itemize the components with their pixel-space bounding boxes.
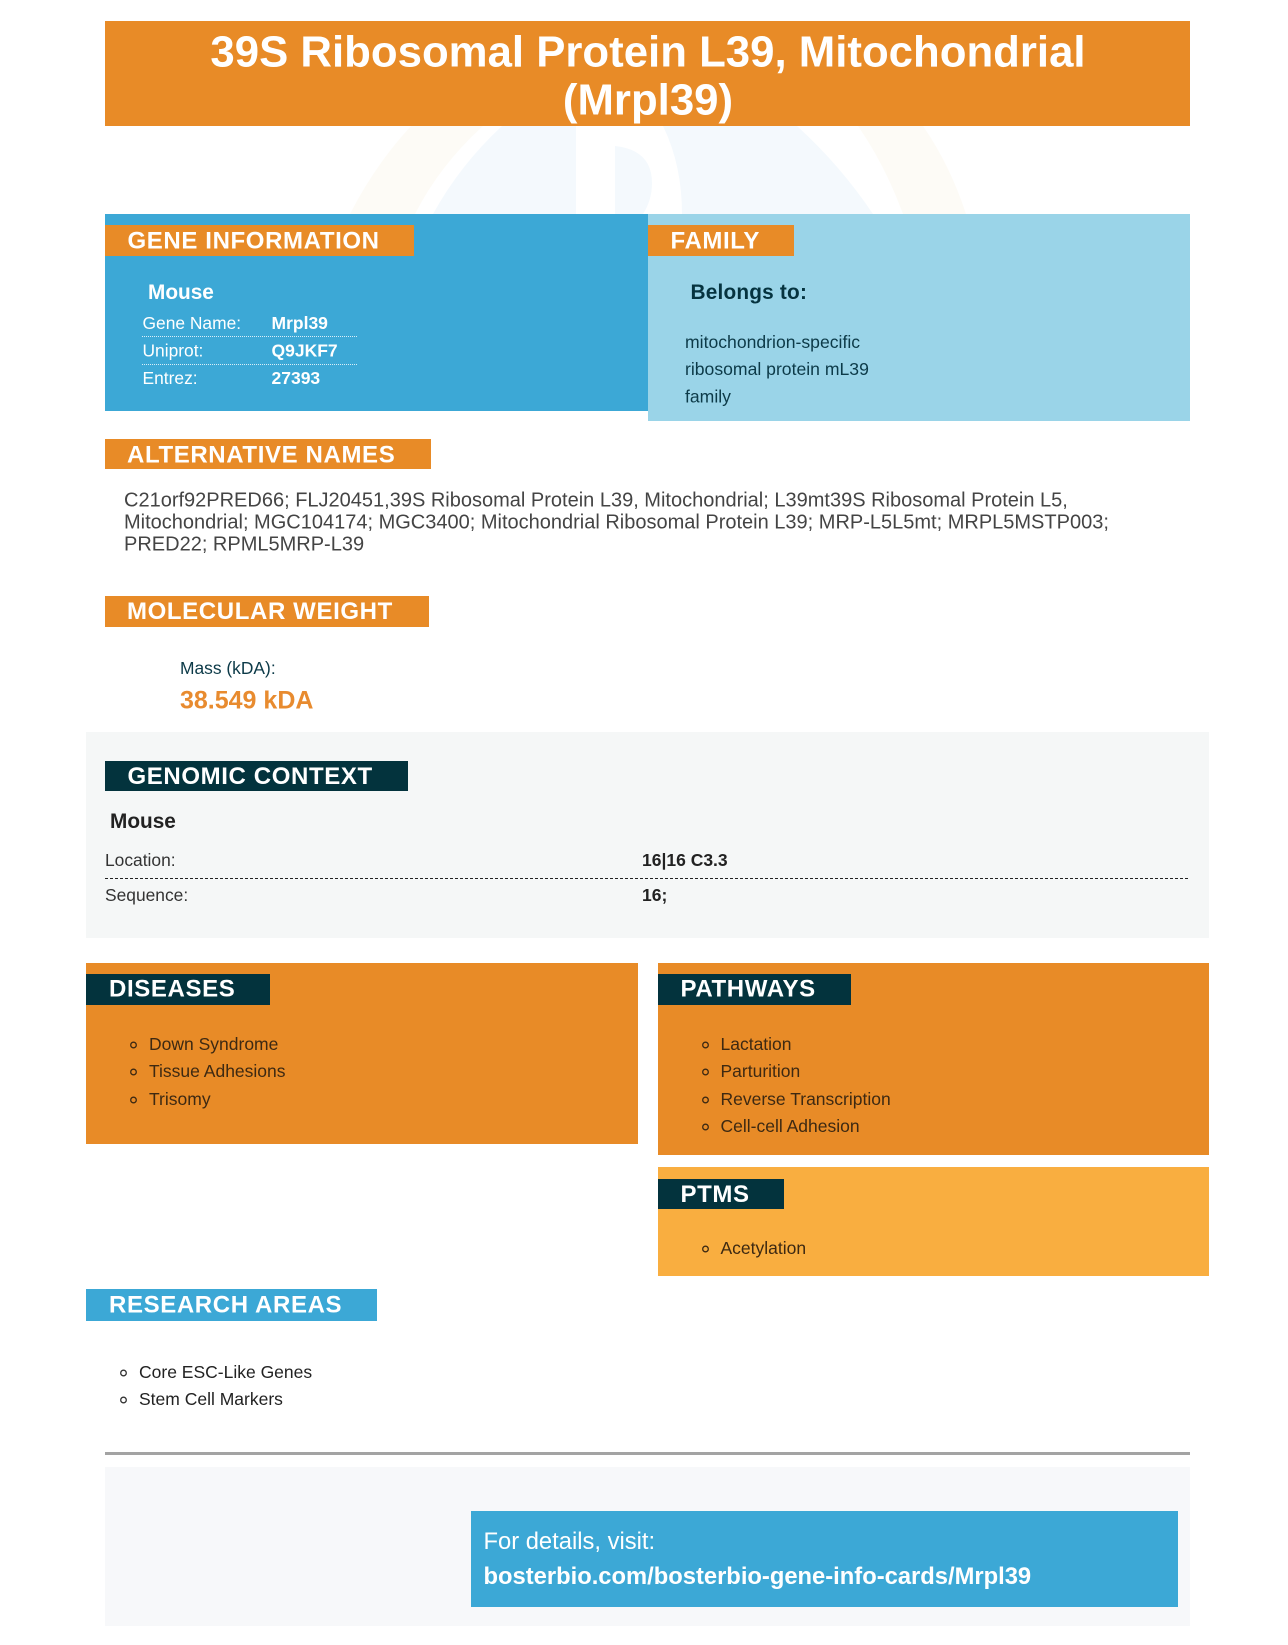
alternative names text: Mitochondrial; MGC104174; MGC3400; Mitochondrial Ribosomal Protein L39; MRP-L5L5mt; MRPL5MSTP003; [124, 512, 1109, 534]
panel: family [648, 214, 1190, 421]
gene table: Gene Name: [142, 313, 241, 333]
title banner: (Mrpl39) [563, 76, 733, 125]
gene table: 27393 [272, 368, 320, 388]
title banner: 39S Ribosomal Protein L39, Mitochondrial [210, 28, 1086, 77]
family text [685, 332, 869, 406]
watermark logo [350, 126, 966, 214]
heading: research areas: RESEARCH AREAS [109, 1291, 342, 1318]
alternative names text: PRED22; RPML5MRP-L39 [124, 534, 364, 556]
heading: family [648, 225, 794, 256]
sequence row: Sequence: [105, 885, 188, 905]
heading: pathways [658, 974, 851, 1005]
pathways list: Reverse Transcription [720, 1089, 891, 1109]
research areas list [121, 1362, 312, 1409]
diseases list: Tissue Adhesions [149, 1061, 286, 1081]
family text: family [685, 386, 731, 406]
mass label: Mass (kDA): [180, 658, 276, 678]
pathways list [703, 1034, 891, 1136]
heading: diseases [86, 974, 270, 1005]
species: mouse: Mouse [110, 810, 176, 833]
panel: gene information [105, 214, 648, 411]
heading: molecular weight: MOLECULAR WEIGHT [127, 598, 393, 625]
sequence row [105, 885, 667, 905]
callout: details link [471, 1511, 1178, 1607]
heading: ptms: PTMS [680, 1181, 750, 1208]
heading: gene information: GENE INFORMATION [128, 228, 380, 254]
diseases list [131, 1034, 286, 1109]
research areas list: Stem Cell Markers [139, 1389, 283, 1409]
location row [105, 850, 728, 870]
gene table [142, 313, 357, 388]
sequence row: 16; [642, 885, 667, 905]
mass value: 38.549 kDA [180, 686, 313, 714]
pathways list: Cell-cell Adhesion [720, 1116, 860, 1136]
callout: details link: For details, visit: [484, 1528, 655, 1555]
family text: mitochondrion-specific [685, 332, 860, 352]
location row: 16|16 C3.3 [642, 850, 728, 870]
gene table: Q9JKF7 [272, 340, 338, 360]
heading: ptms [658, 1179, 784, 1209]
alternative names text [124, 490, 1109, 556]
heading: alternative names: ALTERNATIVE NAMES [127, 441, 395, 468]
belongs to label: Belongs to: [690, 281, 807, 304]
panel: ptms [658, 1167, 1209, 1276]
pathways list: Parturition [720, 1061, 800, 1081]
ptms list: Acetylation [720, 1238, 806, 1258]
callout: details link: bosterbio.com/bosterbio-gene-info-cards/Mrpl39 [484, 1563, 1031, 1590]
panel: genomic context [86, 732, 1209, 938]
panel: diseases [86, 963, 638, 1144]
gene table: Entrez: [142, 368, 198, 388]
gene table: Mrpl39 [272, 313, 328, 333]
heading: genomic context: GENOMIC CONTEXT [128, 763, 373, 790]
pathways list: Lactation [720, 1034, 792, 1054]
heading: family: FAMILY [670, 228, 760, 254]
heading: research areas [86, 1289, 377, 1321]
heading: diseases: DISEASES [109, 976, 235, 1003]
heading: pathways: PATHWAYS [680, 976, 816, 1003]
location row: Location: [105, 850, 176, 870]
diseases list: Down Syndrome [149, 1034, 278, 1054]
research areas list: Core ESC-Like Genes [139, 1362, 312, 1382]
family text: ribosomal protein mL39 [685, 359, 869, 379]
species: mouse: Mouse [148, 281, 214, 304]
diseases list: Trisomy [149, 1089, 211, 1109]
panel: pathways [658, 963, 1209, 1155]
alternative names text: C21orf92PRED66; FLJ20451,39S Ribosomal Protein L39, Mitochondrial; L39mt39S Ribosomal Protein L5, [124, 490, 1068, 512]
gene table: Uniprot: [142, 340, 203, 360]
title banner [105, 21, 1190, 126]
footer panel [105, 1467, 1190, 1626]
